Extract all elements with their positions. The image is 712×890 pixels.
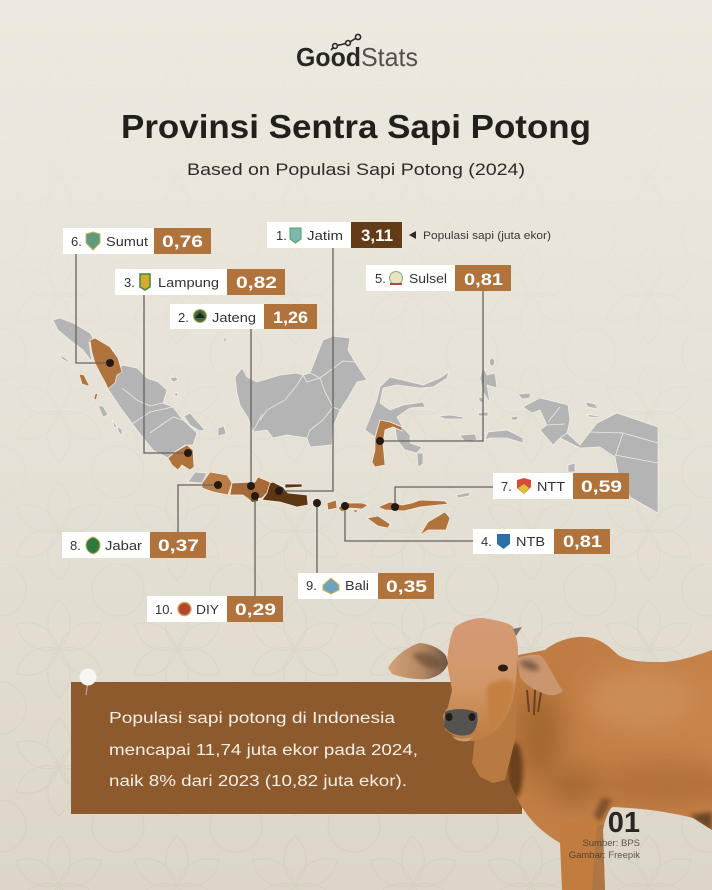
label: 5 Sulsel (366, 265, 511, 291)
label: 1 Jatim: Jatim (307, 228, 343, 243)
label: 4 NTB (473, 529, 610, 554)
cow head (443, 618, 518, 741)
label: 2 Jateng (170, 304, 317, 329)
callout text: Populasi sapi potong di Indonesia (109, 710, 395, 727)
Sumatra (53, 318, 226, 470)
cow right ear (517, 655, 563, 695)
label: 4 NTB: 0,81 (563, 532, 602, 551)
callout panel (71, 682, 522, 814)
label: 10 DIY: 0,29 (235, 600, 276, 619)
logo: GoodStats (296, 34, 418, 72)
label: 10 DIY: 10. (155, 602, 173, 617)
label: 5 Sulsel: 0,81 (464, 270, 503, 289)
page number and source: 01 (608, 807, 640, 839)
label: 2 Jateng: 2. (178, 310, 189, 325)
page number and source: Gambar: Freepik (569, 850, 640, 861)
label: 8 Jabar: 8. (70, 538, 81, 553)
label: 6 Sumut (63, 228, 211, 254)
Java (188, 472, 308, 507)
cow eye (498, 664, 508, 672)
label: 9 Bali: Bali (345, 578, 369, 593)
cow muzzle (444, 709, 478, 741)
label: 7 NTT (493, 473, 629, 499)
cow cheek shade (487, 680, 515, 733)
Maluku (456, 358, 603, 498)
logo: GoodStats: Good (296, 42, 361, 72)
Sulawesi (365, 372, 463, 467)
label: 9 Bali (298, 573, 434, 599)
cow dewlap and neck (470, 680, 518, 783)
label: 7 NTT: NTT (537, 479, 565, 494)
Lesser Sunda (327, 500, 450, 535)
label: 9 Bali: 9. (306, 578, 317, 593)
label: 9 Bali: 0,35 (386, 577, 427, 596)
callout text: naik 8% dari 2023 (10,82 juta ekor). (109, 773, 407, 790)
label: 6 Sumut: 0,76 (162, 232, 203, 251)
label: 1 Jatim: 3,11 (361, 226, 393, 245)
label: 4 NTB: 4. (481, 534, 492, 549)
title: Provinsi Sentra Sapi Potong (121, 108, 591, 145)
map of Indonesia (53, 318, 658, 535)
label: 6 Sumut: Sumut (106, 234, 148, 249)
label: 10 DIY (147, 596, 283, 622)
label: 1 Jatim (267, 222, 402, 248)
label: 7 NTT: 0,59 (581, 477, 622, 496)
cow horn (513, 627, 522, 636)
page number and source (569, 807, 640, 861)
connector lines (76, 248, 493, 596)
label: 2 Jateng: Jateng (212, 310, 256, 325)
label: 3 Lampung: 3. (124, 275, 135, 290)
cow photo illustration (388, 618, 712, 890)
label: 3 Lampung: Lampung (158, 275, 219, 290)
label: 8 Jabar: 0,37 (158, 536, 199, 555)
label: 10 DIY: DIY (196, 602, 219, 617)
label: 8 Jabar (62, 532, 206, 558)
label: 3 Lampung: 0,82 (236, 273, 277, 292)
label: 5 Sulsel: Sulsel (409, 271, 447, 286)
label: 6 Sumut: 6. (71, 234, 82, 249)
callout text: mencapai 11,74 juta ekor pada 2024, (109, 742, 418, 759)
Papua (523, 398, 658, 513)
label: 3 Lampung (115, 269, 285, 295)
label: 1 Jatim: 1. (276, 228, 287, 243)
label: 5 Sulsel: 5. (375, 271, 386, 286)
logo: GoodStats: Stats (361, 42, 418, 72)
legend note: Populasi sapi (juta ekor) (423, 230, 551, 242)
cow body (507, 637, 712, 890)
label: 2 Jateng: 1,26 (273, 308, 308, 327)
icon: pin (80, 668, 96, 695)
page number and source: Sumber: BPS (582, 838, 640, 849)
Kalimantan (224, 336, 367, 447)
label: 7 NTT: 7. (501, 479, 512, 494)
label: 4 NTB: NTB (516, 534, 545, 549)
subtitle: Based on Populasi Sapi Potong (2024) (187, 160, 525, 179)
callout text (109, 710, 418, 790)
map markers (106, 359, 399, 511)
cow left ear (388, 643, 448, 679)
label: 8 Jabar: Jabar (105, 538, 143, 553)
